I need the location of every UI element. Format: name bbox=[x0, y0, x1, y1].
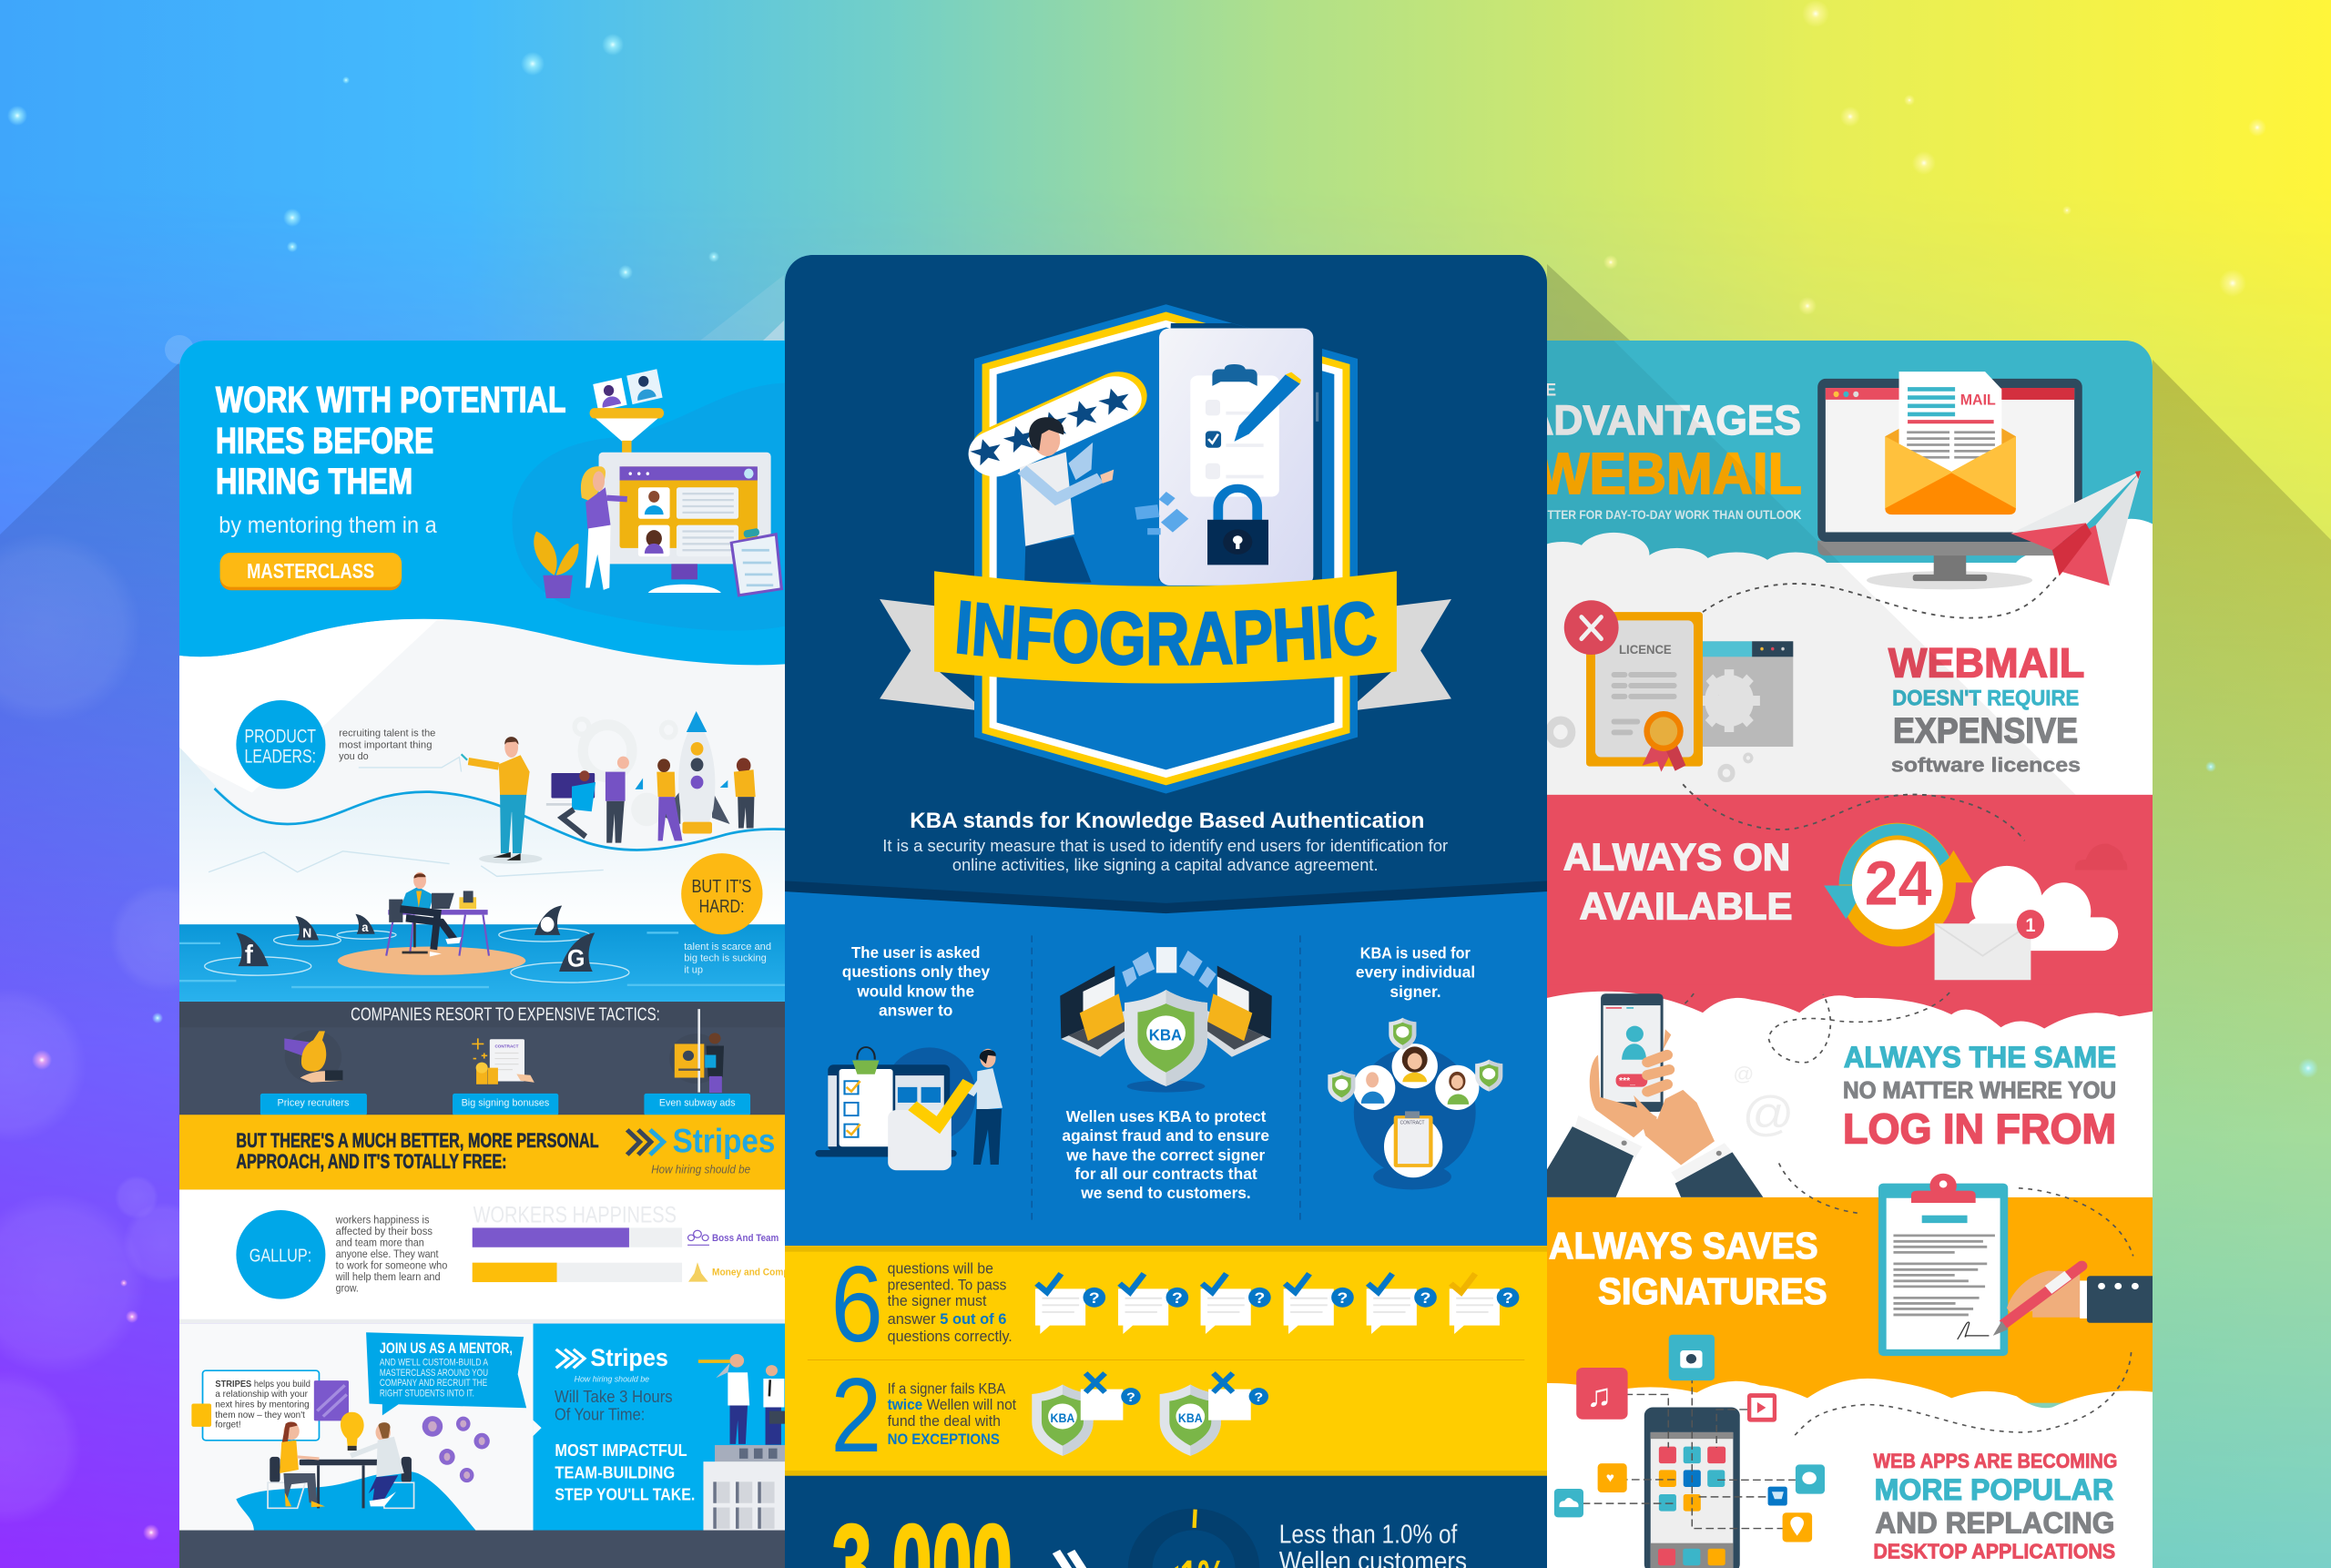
icon: app icons: ♫ bbox=[1586, 1378, 1613, 1413]
text: workers happiness: affected by their boss bbox=[336, 1225, 433, 1237]
icon: individual signers: CONTRACT bbox=[1400, 1121, 1425, 1125]
section: header and illustration area bbox=[173, 337, 792, 1008]
title: infographic: INFOGRAPHIC bbox=[956, 600, 1377, 667]
subheading: by mentoring them in a bbox=[219, 513, 437, 538]
heading: always on available: AVAILABLE bbox=[1580, 885, 1792, 928]
text: six questions: answer 5 out of 6 bbox=[888, 1310, 1007, 1328]
text box: stripes helps you build: next hires by mentoring bbox=[215, 1400, 310, 1410]
text: most impactful: STEP YOU'LL TAKE. bbox=[555, 1486, 695, 1504]
white wave background bbox=[179, 619, 785, 849]
icon row: six question bubbles with checks: ? bbox=[1420, 1289, 1430, 1307]
icon: monitor bbox=[1817, 379, 2082, 589]
white cloud apps background bbox=[1539, 1379, 2159, 1568]
section: webmail top bbox=[1523, 337, 2174, 995]
text: talent is scarce: it up bbox=[684, 964, 703, 976]
text: web apps becoming popular bbox=[1873, 1450, 2117, 1563]
heading: expensive tactics bbox=[173, 1002, 789, 1027]
icon: team and rocket bbox=[546, 711, 756, 843]
heading bbox=[215, 386, 566, 495]
icon: kba shield with laptops bbox=[1060, 947, 1272, 1093]
icon: building with lookout men bbox=[698, 1354, 790, 1532]
heading: always on available bbox=[1563, 835, 1792, 928]
text: signer fails twice: fund the deal with bbox=[888, 1412, 1001, 1430]
text: always the same: NO MATTER WHERE YOU bbox=[1843, 1077, 2116, 1104]
icon: licence certificate bbox=[1550, 612, 1793, 779]
icon: candidate avatars bbox=[422, 1416, 490, 1482]
icon: hand signing with pen bbox=[1993, 1261, 2158, 1336]
bar chart: workers happiness: WORKERS HAPPINESS bbox=[473, 1204, 677, 1228]
text: wellen uses kba bbox=[1062, 1107, 1269, 1202]
heading: advantages of webmail: ADVANTAGES bbox=[1524, 398, 1801, 443]
icon: potted plant bbox=[534, 532, 579, 598]
text: talent is scarce bbox=[684, 942, 771, 976]
logo: stripes bbox=[627, 1123, 775, 1176]
dark tactics band bbox=[173, 1002, 789, 1115]
icon row: six question bubbles with checks: ? bbox=[1172, 1289, 1183, 1307]
heading: advantages of webmail bbox=[1523, 380, 1802, 522]
text box: stripes helps you build bbox=[191, 1370, 349, 1441]
icon: hands holding phone bbox=[1539, 993, 1763, 1197]
text: signer fails twice: twice Wellen will not bbox=[888, 1396, 1016, 1413]
speech banner: join us as a mentor: JOIN US AS A MENTOR, bbox=[380, 1339, 513, 1357]
icon row: two failed shields: KBA bbox=[1051, 1411, 1074, 1426]
text: six questions: the signer must bbox=[888, 1292, 986, 1309]
icon: individual signers bbox=[1328, 1018, 1502, 1190]
text: will take 3 hours: Of Your Time: bbox=[555, 1406, 645, 1424]
icon: cloud with mail notification bbox=[1935, 844, 2127, 980]
label: subway ads: Even subway ads bbox=[659, 1098, 736, 1108]
text: always the same: LOG IN FROM bbox=[1843, 1105, 2116, 1153]
orange section bbox=[1539, 1197, 2159, 1403]
text: will take 3 hours: Will Take 3 Hours bbox=[555, 1388, 673, 1407]
title: infographic bbox=[956, 600, 1377, 667]
text: signer fails twice: NO EXCEPTIONS bbox=[888, 1431, 1000, 1448]
yellow section bbox=[783, 1246, 1549, 1476]
bottom navy section bbox=[783, 1476, 1549, 1568]
clouds bbox=[1535, 519, 2174, 797]
icon: shark fins with brand logos: f bbox=[245, 940, 254, 969]
logo: stripes white bbox=[556, 1344, 668, 1383]
icon: shark fins with brand logos: N bbox=[302, 926, 311, 942]
text: recruiting talent: recruiting talent is the bbox=[339, 728, 435, 739]
red strip behind cloud edge bbox=[1539, 985, 2159, 1036]
text: recruiting talent: you do bbox=[339, 751, 369, 762]
logo: stripes white: Stripes bbox=[590, 1344, 668, 1371]
icon: licence certificate: LICENCE bbox=[1619, 643, 1672, 657]
logo: stripes white: How hiring should be bbox=[575, 1375, 649, 1383]
icon: red x badge bbox=[1564, 600, 1619, 655]
yellow banner bbox=[934, 571, 1397, 684]
dashed path line in red bbox=[1683, 784, 2024, 840]
mentor section background bbox=[173, 1319, 789, 1531]
text: signer fails twice bbox=[888, 1380, 1016, 1448]
dashed connectors bbox=[1583, 1376, 1796, 1529]
icon: hands holding phone: ***_ bbox=[1619, 1076, 1635, 1086]
speech banner: join us as a mentor: AND WE'LL CUSTOM-BUILD A bbox=[380, 1358, 488, 1368]
icon: shark fins with brand logos: G bbox=[567, 946, 585, 972]
text: workers happiness: workers happiness is bbox=[335, 1214, 429, 1226]
text: wellen uses kba: we have the correct signer bbox=[1065, 1145, 1265, 1164]
icon row: two failed shields: ? bbox=[1254, 1390, 1263, 1405]
speech banner: join us as a mentor: MASTERCLASS AROUND YOU bbox=[380, 1368, 488, 1379]
text box: stripes helps you build: them now – they won't bbox=[215, 1410, 305, 1420]
text: recruiting talent bbox=[339, 728, 435, 762]
icon: shark fins with brand logos: a bbox=[361, 921, 369, 934]
icon: paper plane bbox=[2010, 471, 2141, 585]
icon: questionnaire on laptop bbox=[815, 1047, 1003, 1170]
text: security measure: It is a security measure that is used to identify end users for identification for bbox=[882, 837, 1448, 856]
text: will take 3 hours bbox=[555, 1388, 673, 1424]
text: six questions: questions will be bbox=[888, 1259, 993, 1277]
text: every individual signer: every individual bbox=[1356, 963, 1475, 981]
text: user is asked: The user is asked bbox=[851, 943, 980, 962]
text: web apps becoming popular: DESKTOP APPLICATIONS bbox=[1873, 1540, 2115, 1563]
bar chart: workers happiness: Boss And Team bbox=[712, 1232, 779, 1244]
text: workers happiness bbox=[335, 1214, 447, 1294]
island bbox=[338, 947, 525, 975]
speech banner: join us as a mentor: RIGHT STUDENTS INTO IT. bbox=[380, 1389, 474, 1399]
yellow callout band bbox=[173, 1115, 789, 1189]
icon: shark fins with brand logos bbox=[236, 906, 595, 972]
donut chart: less than 1 percent bbox=[1140, 1510, 1247, 1568]
icon: cloud with mail notification: 1 bbox=[2025, 914, 2035, 936]
circle: product leaders bbox=[236, 700, 325, 789]
white cloud login background bbox=[1539, 992, 2159, 1200]
panel: right infographic, advantages of webmail bbox=[1523, 337, 2174, 1568]
icon: money bag bbox=[284, 1031, 342, 1084]
text: most impactful: TEAM-BUILDING bbox=[555, 1464, 675, 1482]
text: recruiting talent: most important thing bbox=[339, 739, 433, 750]
faint at signs bbox=[1733, 1063, 1795, 1141]
text: talent is scarce: talent is scarce and bbox=[684, 942, 771, 952]
label: big signing bonuses: Big signing bonuses bbox=[462, 1098, 550, 1108]
masterclass button bbox=[220, 553, 402, 590]
icon: contract and coins bbox=[472, 1038, 534, 1084]
text: six questions bbox=[888, 1259, 1013, 1345]
text: webmail doesn't require: DOESN'T REQUIRE bbox=[1892, 687, 2079, 711]
text: wellen uses kba: we send to customers. bbox=[1080, 1184, 1251, 1202]
icon row: six question bubbles with checks: ? bbox=[1254, 1289, 1265, 1307]
text: security measure bbox=[882, 837, 1448, 875]
blue section with chevron divider bbox=[783, 881, 1549, 1246]
number: 2: 2 bbox=[830, 1357, 881, 1474]
ribbon tails bbox=[880, 599, 1451, 710]
dashed path lines bbox=[1685, 993, 2133, 1437]
text: every individual signer bbox=[1356, 943, 1475, 1001]
text: wellen uses kba: for all our contracts that bbox=[1074, 1165, 1257, 1183]
masterclass button: MASTERCLASS bbox=[247, 559, 374, 583]
text: wellen uses kba: against fraud and to ensure bbox=[1062, 1126, 1269, 1145]
heading: WORK WITH POTENTIAL bbox=[216, 381, 566, 421]
text: always the same: ALWAYS THE SAME bbox=[1844, 1041, 2116, 1074]
icon: subway ad bbox=[669, 1009, 724, 1093]
text: workers happiness: and team more than bbox=[336, 1237, 424, 1248]
yellow callout band: APPROACH, AND IT'S TOTALLY FREE: bbox=[236, 1151, 506, 1173]
icon row: two failed shields: KBA bbox=[1178, 1411, 1203, 1426]
section: badge and intro bbox=[880, 304, 1451, 874]
icon row: six question bubbles with checks: ? bbox=[1502, 1289, 1513, 1307]
dashed dividers bbox=[1032, 935, 1300, 1220]
heading: always saves signatures: ALWAYS SAVES bbox=[1549, 1226, 1818, 1267]
dark footer bbox=[173, 1531, 789, 1568]
text: user is asked: questions only they bbox=[842, 962, 991, 981]
circle: gallup: GALLUP: bbox=[249, 1246, 311, 1266]
icon: open envelope with mail bbox=[1885, 372, 2016, 514]
diagonal shade bbox=[1539, 337, 2076, 795]
label: subway ads bbox=[644, 1094, 750, 1115]
dashed path lines bbox=[1683, 577, 2056, 840]
heading: HIRES BEFORE bbox=[216, 422, 433, 462]
pale lower wave with blue line bbox=[179, 747, 789, 931]
number: 6: 6 bbox=[830, 1243, 883, 1364]
bar chart: workers happiness bbox=[473, 1204, 789, 1282]
heading: expensive tactics: COMPANIES RESORT TO EXPENSIVE TACTICS: bbox=[351, 1004, 660, 1024]
circle: but it's hard: BUT IT'S bbox=[691, 876, 751, 897]
icon row: six question bubbles with checks: ? bbox=[1338, 1289, 1348, 1307]
text: workers happiness: grow. bbox=[336, 1282, 359, 1294]
speech banner: join us as a mentor bbox=[366, 1332, 526, 1415]
text: webmail doesn't require: WEBMAIL bbox=[1888, 640, 2084, 687]
text: webmail doesn't require: EXPENSIVE bbox=[1893, 710, 2078, 750]
circle: product leaders: PRODUCT bbox=[244, 726, 316, 748]
faint at signs: @ bbox=[1733, 1063, 1754, 1085]
icon: app icons: ♥ bbox=[1606, 1471, 1614, 1486]
icon: man working at desk on island bbox=[386, 872, 489, 957]
heading: always saves signatures bbox=[1549, 1226, 1827, 1311]
icon: mentor meeting at table bbox=[268, 1412, 414, 1508]
text: webmail doesn't require bbox=[1888, 640, 2084, 777]
icon row: two failed shields bbox=[1032, 1373, 1268, 1456]
icon: man with pointer bbox=[462, 737, 543, 864]
icon: woman presenting bbox=[581, 466, 627, 590]
text: workers happiness: anyone else. They want bbox=[336, 1247, 439, 1260]
text: webmail doesn't require: software licences bbox=[1891, 754, 2081, 777]
text: user is asked: answer to bbox=[879, 1001, 952, 1019]
icon: phone with checklist and lock bbox=[1159, 328, 1318, 585]
text: workers happiness: to work for someone who bbox=[336, 1259, 447, 1271]
text: user is asked: would know the bbox=[857, 983, 974, 1000]
shield badge bbox=[974, 304, 1358, 794]
logo: stripes: How hiring should be bbox=[651, 1163, 750, 1176]
text: every individual signer: KBA is used for bbox=[1360, 943, 1471, 962]
icon: falling money bbox=[1135, 492, 1188, 535]
text: six questions: presented. To pass bbox=[888, 1276, 1006, 1293]
yellow callout band: BUT THERE'S A MUCH BETTER, MORE PERSONAL bbox=[236, 1130, 599, 1152]
ripple lines bbox=[179, 928, 785, 987]
text: always the same bbox=[1843, 1041, 2116, 1153]
bar chart: workers happiness: Money and Comp bbox=[712, 1267, 789, 1278]
icon row: six question bubbles with checks bbox=[1035, 1274, 1519, 1334]
heading: advantages of webmail: WEBMAIL bbox=[1537, 442, 1802, 507]
text: signer fails twice: If a signer fails KBA bbox=[888, 1380, 1005, 1397]
icon: app icons bbox=[1554, 1335, 1825, 1542]
icon: kba shield with laptops: KBA bbox=[1149, 1026, 1182, 1044]
icon: open envelope with mail: MAIL bbox=[1960, 392, 1996, 409]
icon: hiring funnel and monitor bbox=[590, 369, 783, 597]
icon row: six question bubbles with checks: ? bbox=[1089, 1289, 1100, 1307]
section: login and signatures bbox=[1539, 985, 2159, 1568]
heading: advantages of webmail: BETTER FOR DAY-TO-DAY WORK THAN OUTLOOK bbox=[1532, 508, 1802, 522]
text: every individual signer: signer. bbox=[1389, 983, 1441, 1001]
label: pricey recruiters: Pricey recruiters bbox=[277, 1098, 350, 1108]
text: web apps becoming popular: WEB APPS ARE BECOMING bbox=[1873, 1450, 2117, 1472]
panel: left infographic, hiring masterclass bbox=[173, 337, 792, 1568]
section: lower panel content bbox=[173, 1002, 790, 1568]
text: less than one percent of customers: Less than 1.0% of bbox=[1279, 1521, 1458, 1549]
circle: but it's hard: HARD: bbox=[699, 896, 745, 917]
text box: stripes helps you build: forget! bbox=[215, 1420, 241, 1431]
heading: always on available: ALWAYS ON bbox=[1563, 835, 1790, 879]
header blob bbox=[513, 383, 789, 630]
section: how kba works bbox=[783, 881, 1549, 1568]
icon: person bbox=[1020, 417, 1114, 583]
text: web apps becoming popular: AND REPLACING bbox=[1876, 1506, 2114, 1540]
icon: clipboard document bbox=[1878, 1174, 2008, 1356]
circle: but it's hard bbox=[681, 853, 763, 934]
text: web apps becoming popular: MORE POPULAR bbox=[1875, 1473, 2113, 1507]
water bbox=[179, 924, 789, 1008]
speech banner: join us as a mentor: COMPANY AND RECRUIT THE bbox=[380, 1378, 488, 1389]
logo: stripes: Stripes bbox=[673, 1123, 775, 1160]
icon: 24 hour clock bbox=[1824, 823, 1973, 947]
text: security measure: online activities, like signing a capital advance agreement. bbox=[952, 856, 1379, 875]
heading: always saves signatures: SIGNATURES bbox=[1598, 1270, 1827, 1311]
faint at signs: @ bbox=[1742, 1087, 1795, 1141]
text: most impactful bbox=[555, 1442, 695, 1504]
text: most impactful: MOST IMPACTFUL bbox=[555, 1442, 687, 1461]
label: big signing bonuses bbox=[453, 1094, 558, 1115]
text: wellen uses kba: Wellen uses KBA to protect bbox=[1066, 1107, 1266, 1125]
text: user is asked bbox=[842, 943, 991, 1019]
red section bbox=[1539, 795, 2159, 995]
heading: kba stands for: KBA stands for Knowledge Based Authentication bbox=[910, 809, 1424, 833]
icon row: two failed shields: ? bbox=[1126, 1390, 1135, 1405]
text box: stripes helps you build: a relationship with your bbox=[215, 1390, 308, 1400]
label: pricey recruiters bbox=[260, 1094, 367, 1115]
text: less than one percent of customers bbox=[1279, 1521, 1467, 1568]
text: six questions: questions correctly. bbox=[888, 1328, 1013, 1345]
icon: star rating pill bbox=[967, 385, 1134, 467]
circle: gallup bbox=[236, 1210, 325, 1299]
text: talent is scarce: big tech is sucking bbox=[684, 952, 767, 964]
icon: contract and coins: CONTRACT bbox=[494, 1044, 519, 1048]
teal header background bbox=[1539, 337, 2159, 596]
icon: 24 hour clock: 24 bbox=[1865, 849, 1932, 919]
circle: product leaders: LEADERS: bbox=[244, 746, 316, 768]
icon: phone with app grid bbox=[1644, 1408, 1740, 1568]
panel: center infographic, knowledge based authentication bbox=[785, 255, 1547, 1568]
heading: HIRING THEM bbox=[216, 462, 412, 502]
text: workers happiness: will help them learn and bbox=[335, 1270, 441, 1283]
heading: advantages of webmail: THE bbox=[1523, 380, 1556, 399]
icon: chevron arrows bbox=[1056, 1552, 1090, 1568]
text box: stripes helps you build: STRIPES helps you build bbox=[215, 1379, 310, 1390]
blue stripes promo panel bbox=[534, 1324, 789, 1531]
white gallup band bbox=[173, 1189, 789, 1320]
